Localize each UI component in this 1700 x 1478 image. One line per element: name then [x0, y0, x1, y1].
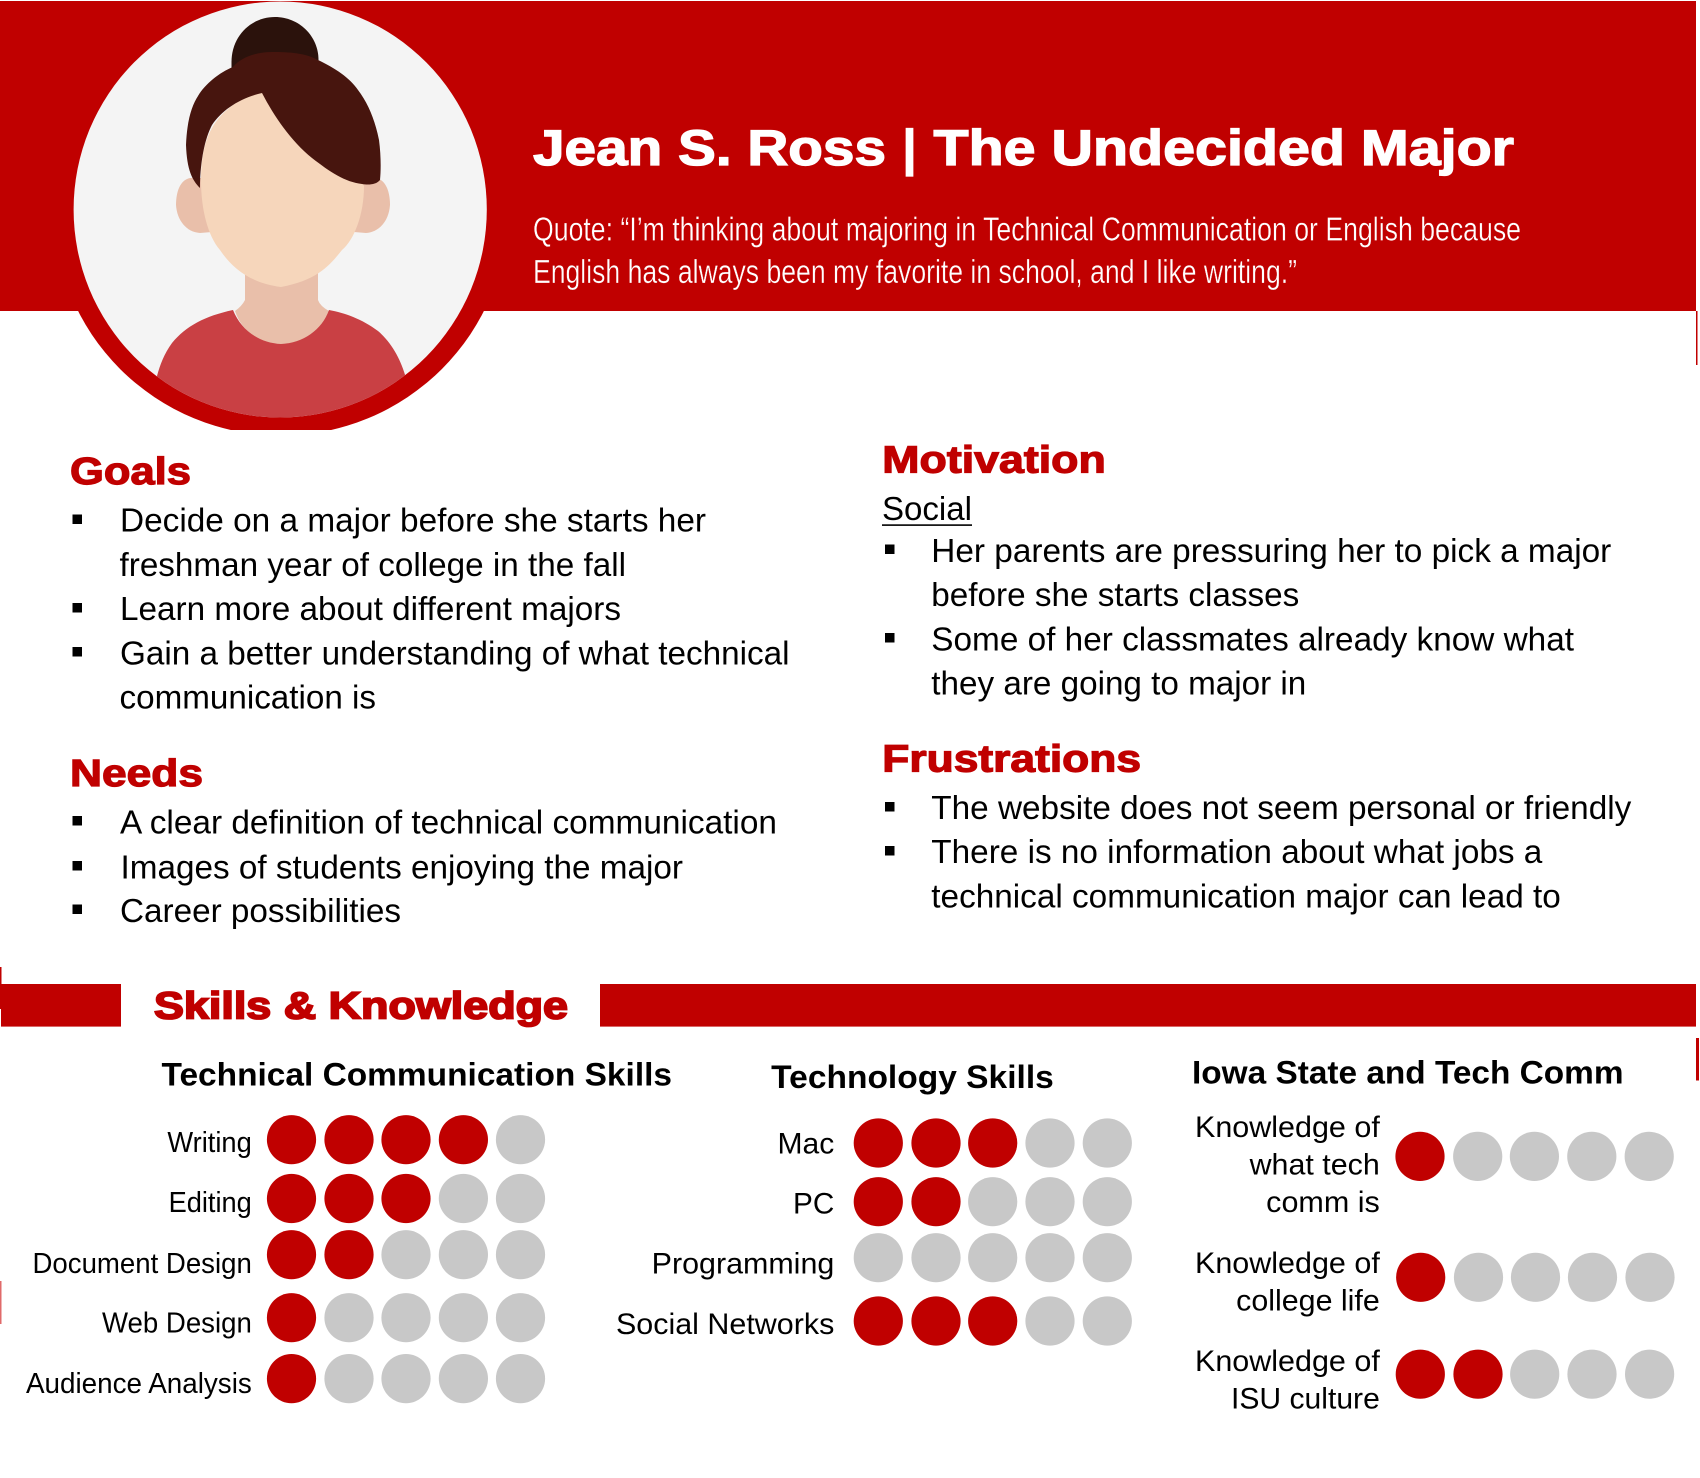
row: knowledge of college life: college life: [1236, 1284, 1380, 1317]
row: document design: [32, 1230, 545, 1280]
row: writing: [167, 1115, 545, 1164]
panel: frustrations: [882, 739, 1632, 916]
row: programming: Programming: [652, 1247, 834, 1280]
title: Jean S. Ross: [533, 120, 886, 176]
heading: frustrations: Frustrations: [882, 739, 1141, 781]
frustrations list: [885, 790, 1632, 916]
frustrations list: There is no information about what jobs a: [931, 834, 1543, 871]
row: social networks: [616, 1296, 1132, 1346]
panel: motivation: [882, 439, 1611, 702]
quote: English has always been my favorite in school, and I like writing.”: [533, 253, 1297, 290]
heading: motivation: Motivation: [882, 439, 1106, 481]
motivation list: they are going to major in: [931, 665, 1306, 702]
title: [533, 120, 1514, 177]
skills section band: [0, 967, 1699, 1324]
panel: goals: [70, 451, 790, 716]
row: pc: PC: [793, 1187, 834, 1220]
panel: needs: [70, 753, 777, 930]
needs list: Images of students enjoying the major: [120, 849, 683, 886]
row: writing: Writing: [167, 1127, 252, 1159]
title: |: [902, 120, 916, 177]
frustrations list: The website does not seem personal or friendly: [931, 790, 1632, 827]
row: web design: Web Design: [102, 1308, 252, 1340]
motivation list: Some of her classmates already know what: [931, 621, 1575, 658]
panel: iowa state and tech comm: [1192, 1055, 1675, 1416]
title: The Undecided Major: [934, 120, 1514, 176]
goals list: Learn more about different majors: [120, 591, 621, 628]
heading: technology skills: Technology Skills: [771, 1059, 1054, 1095]
motivation list: before she starts classes: [931, 577, 1299, 614]
row: social networks: Social Networks: [616, 1308, 834, 1341]
needs list: Career possibilities: [120, 893, 401, 930]
row: knowledge of what tech comm is: [1195, 1111, 1674, 1219]
needs list: A clear definition of technical communication: [120, 805, 777, 842]
goals list: Gain a better understanding of what technical: [120, 635, 790, 672]
row: editing: [169, 1174, 545, 1223]
goals list: communication is: [120, 679, 376, 716]
row: knowledge of college life: Knowledge of: [1195, 1247, 1380, 1280]
heading: technical communication skills: Technical Communication Skills: [162, 1056, 672, 1092]
panel: technology skills: [616, 1059, 1132, 1346]
row: pc: [793, 1177, 1132, 1226]
heading: needs: Needs: [70, 753, 203, 795]
goals list: freshman year of college in the fall: [120, 547, 626, 584]
row: knowledge of isu culture: [1195, 1345, 1674, 1416]
subheading: social: Social: [882, 491, 972, 528]
row: knowledge of college life: [1195, 1247, 1675, 1317]
row: audience analysis: [26, 1354, 545, 1403]
heading: skills and knowledge: Skills & Knowledge: [154, 985, 568, 1027]
row: editing: Editing: [169, 1187, 252, 1219]
row: web design: [102, 1293, 545, 1342]
goals list: [72, 503, 790, 716]
row: knowledge of what tech comm is: comm is: [1266, 1186, 1380, 1219]
row: mac: [778, 1118, 1132, 1168]
row: knowledge of what tech comm is: what tech: [1249, 1149, 1380, 1182]
row: document design: Document Design: [32, 1248, 252, 1280]
heading: iowa state and tech comm: Iowa State and Tech Comm: [1192, 1055, 1624, 1091]
row: knowledge of isu culture: Knowledge of: [1195, 1345, 1380, 1378]
goals list: Decide on a major before she starts her: [120, 503, 706, 540]
motivation list: [885, 533, 1611, 702]
heading: goals: Goals: [70, 451, 191, 493]
row: audience analysis: Audience Analysis: [26, 1368, 252, 1400]
avatar portrait: [74, 2, 487, 430]
needs list: [72, 805, 777, 930]
row: knowledge of isu culture: ISU culture: [1231, 1383, 1380, 1416]
frustrations list: technical communication major can lead to: [931, 879, 1561, 916]
row: programming: [652, 1233, 1132, 1282]
row: knowledge of what tech comm is: Knowledge of: [1195, 1111, 1380, 1144]
motivation list: Her parents are pressuring her to pick a major: [931, 533, 1611, 570]
quote: [533, 210, 1521, 290]
panel: technical communication skills: [26, 1056, 672, 1403]
header banner: [0, 1, 1698, 365]
row: mac: Mac: [778, 1128, 834, 1161]
